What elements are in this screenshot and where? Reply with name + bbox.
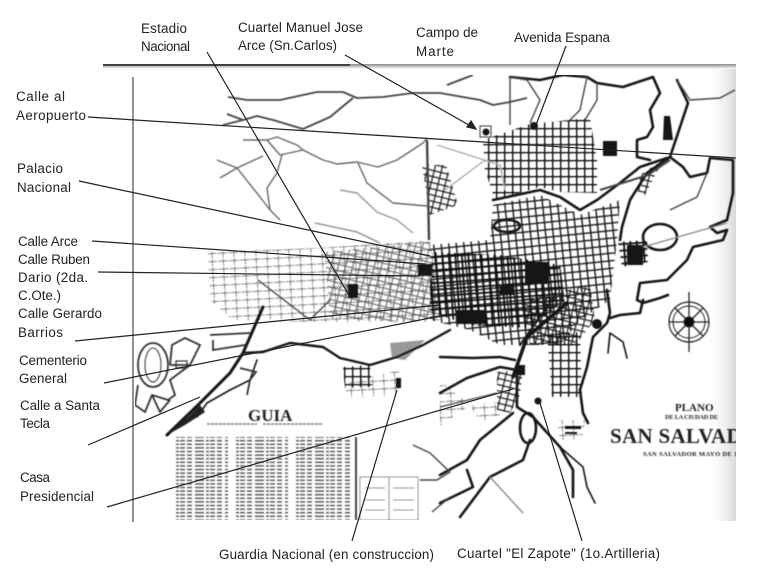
leader lines xyxy=(75,46,736,541)
leader: Calle al Aeropuerto xyxy=(88,117,736,158)
label: Calle Ruben Dario: C.Ote.) xyxy=(18,288,61,303)
leader: Calle a Santa Tecla xyxy=(88,397,200,445)
label: Estadio Nacional: Estadio xyxy=(141,21,187,36)
label: Calle Ruben Dario: Calle Ruben xyxy=(18,252,90,267)
label: Palacio Nacional: Palacio xyxy=(17,161,63,176)
leader: Cuartel El Zapote xyxy=(540,403,582,541)
label: Calle al Aeropuerto: Aeropuerto xyxy=(16,108,86,123)
leader: Palacio Nacional xyxy=(79,181,430,256)
label: Calle al Aeropuerto: Calle al xyxy=(16,89,65,104)
label: Calle Gerardo Barrios: Barrios xyxy=(18,325,63,340)
sheet background xyxy=(103,65,736,521)
label: Cuartel El Zapote: Cuartel "El Zapote" (1o.Artilleria) xyxy=(457,546,660,561)
label: Palacio Nacional: Nacional xyxy=(17,180,71,195)
label: Estadio Nacional: Nacional xyxy=(141,39,190,54)
label: Campo de Marte: Marte xyxy=(416,44,454,59)
stadium and park roads xyxy=(135,333,256,412)
map sheet: Plano de la ciudad de San Salvador xyxy=(103,64,757,521)
label: Cuartel Manuel Jose Arce: Arce (Sn.Carlos) xyxy=(238,38,337,53)
right edge shading xyxy=(719,69,736,521)
label: Calle a Santa Tecla: Calle a Santa xyxy=(20,398,101,413)
label: Calle Arce: Calle Arce xyxy=(18,234,78,249)
compass rose xyxy=(669,292,709,352)
leader: Calle Ruben Dario xyxy=(98,272,420,276)
label: Cuartel Manuel Jose Arce: Cuartel Manuel Jose xyxy=(238,20,363,35)
top edge band xyxy=(103,64,736,69)
leader: Guardia Nacional xyxy=(352,390,397,541)
leader: Calle Arce xyxy=(92,241,425,264)
leader: Calle Gerardo Barrios xyxy=(75,305,440,341)
thick rivers xyxy=(167,75,733,517)
map title: Plano de la ciudad de San Salvador: SAN SALVADOR MAYO DE 1931 xyxy=(643,451,748,458)
airfield road xyxy=(172,404,206,432)
label: Calle Gerardo Barrios: Calle Gerardo xyxy=(18,306,102,321)
leader: Casa Presidencial xyxy=(107,389,513,507)
dark city blocks xyxy=(348,116,673,434)
label: Campo de Marte: Campo de xyxy=(416,25,478,40)
label: Cementerio General: Cementerio xyxy=(19,353,87,368)
label: Casa Presidencial: Casa xyxy=(20,470,51,485)
guide table xyxy=(174,437,356,520)
legend box xyxy=(360,477,418,520)
leader: Avenida Espana xyxy=(536,46,566,125)
guide sub-heading lines xyxy=(207,423,322,425)
map title: Plano de la ciudad de San Salvador: PLANO xyxy=(675,402,714,414)
map title: Guia: GUIA xyxy=(248,406,293,425)
map title: Plano de la ciudad de San Salvador xyxy=(610,403,736,457)
map title: Plano de la ciudad de San Salvador: DE LA CIUDAD DE xyxy=(665,414,718,421)
label: Calle a Santa Tecla: Tecla xyxy=(20,416,51,431)
label: Avenida Espana: Avenida Espana xyxy=(514,30,611,45)
leader: Cementerio General xyxy=(104,316,440,383)
leader: Cuartel Manuel Jose Arce xyxy=(345,55,476,129)
thin roads xyxy=(217,75,735,513)
city grid blocks xyxy=(208,118,663,440)
label: Cementerio General: General xyxy=(19,371,67,386)
map frame rules xyxy=(103,65,350,522)
leader: Estadio Nacional xyxy=(207,52,350,297)
textured park xyxy=(390,340,425,360)
street network and rivers xyxy=(135,75,757,520)
label: Casa Presidencial: Presidencial xyxy=(20,489,94,504)
city block outline: Campo de Marte xyxy=(480,126,491,137)
label: Guardia Nacional: Guardia Nacional (en construccion) xyxy=(219,547,434,562)
label: Calle Ruben Dario: Dario (2da. xyxy=(18,270,88,285)
